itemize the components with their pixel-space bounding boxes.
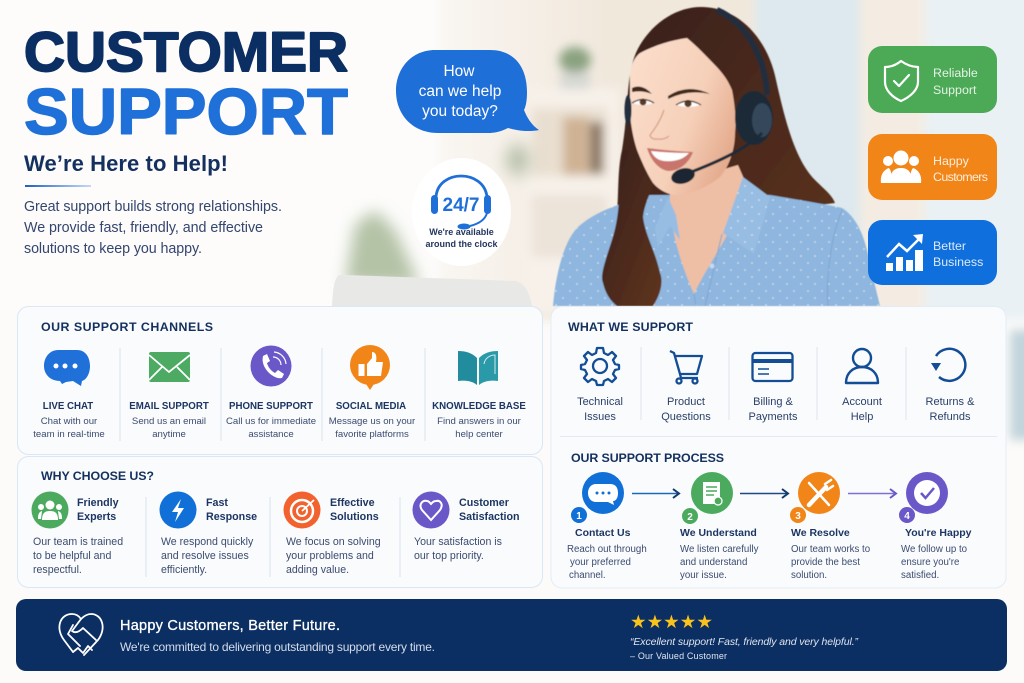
reason: fast response: Response (206, 511, 257, 523)
reason: friendly experts: Friendly (77, 497, 119, 509)
reason: friendly experts: Our team is trained (33, 536, 123, 548)
step 4: you're happy: You're Happy (905, 527, 972, 539)
title: customer support: CUSTOMER (24, 20, 348, 83)
icon: 24/7 headset (431, 176, 491, 230)
intro text: We provide fast, friendly, and effective (24, 220, 263, 236)
panel: our support channels: OUR SUPPORT CHANNELS (41, 320, 213, 334)
footer banner (16, 599, 1007, 671)
reason: effective solutions (284, 492, 381, 576)
icon: people (881, 150, 921, 183)
panel: why choose us: WHY CHOOSE US? (41, 469, 154, 483)
item: technical issues (577, 348, 623, 423)
step 2: we understand: We Understand (680, 527, 757, 539)
reason: customer satisfaction: Customer (459, 497, 509, 509)
reason: customer satisfaction: Your satisfaction is (414, 536, 502, 548)
heading: our support process: OUR SUPPORT PROCESS (571, 451, 724, 465)
badge: happy customers: Happy (933, 154, 970, 168)
channel: email text: EMAIL SUPPORT (129, 401, 209, 412)
step 2: we understand: your issue. (680, 570, 727, 581)
channel: phone text: Call us for immediate (226, 416, 316, 427)
step 1: contact us: Contact Us (575, 527, 631, 539)
reason: effective solutions: Effective (330, 497, 375, 509)
photo: support agent with headset (553, 7, 880, 306)
item: returns and refunds (926, 349, 975, 423)
icon: email (149, 352, 190, 382)
reason: customer satisfaction: Satisfaction (459, 511, 520, 523)
step 2: we understand (680, 472, 759, 581)
icon: knowledge base (458, 351, 498, 385)
item: billing and payments: Payments (749, 411, 798, 423)
step 2: we understand: 2 (687, 512, 693, 523)
item: technical issues: Issues (584, 411, 616, 423)
testimonial quote (630, 636, 858, 661)
icon: live chat (44, 350, 90, 386)
arrow 3 (848, 489, 896, 498)
step 1: contact us: 1 (576, 511, 582, 522)
panel: why choose us (18, 456, 542, 588)
channel: email text: Send us an email (132, 416, 206, 427)
speech bubble: How (443, 63, 475, 80)
channel: live chat text: Chat with our (41, 416, 98, 427)
icon: growth chart (886, 234, 923, 271)
step 3: we resolve: Our team works to (791, 544, 870, 555)
step 3: we resolve: We Resolve (791, 527, 850, 539)
item: returns and refunds: Refunds (930, 411, 971, 423)
step 4: you're happy: satisfied. (901, 570, 939, 581)
reason: effective solutions: your problems and (286, 550, 374, 562)
step 4: you're happy: ensure you're (901, 557, 959, 568)
step 3: we resolve (790, 472, 870, 581)
channel: social media text: Message us on your (329, 416, 416, 427)
channel: knowledge base text: Find answers in our (437, 416, 522, 427)
intro text (24, 199, 282, 257)
channel: social media text: SOCIAL MEDIA (336, 401, 406, 412)
24/7 badge: 24/7 (443, 195, 479, 216)
channel: knowledge base text: help center (455, 429, 504, 440)
24/7 badge: around the clock (425, 239, 498, 249)
reason: friendly experts: respectful. (33, 564, 82, 576)
step 1: contact us (567, 472, 647, 581)
channel: social media text (329, 401, 416, 440)
title: customer support: SUPPORT (24, 75, 348, 148)
speech bubble (396, 50, 539, 133)
testimonial quote: “Excellent support! Fast, friendly and very helpful.” (630, 636, 858, 648)
24/7 badge: We're available (429, 227, 494, 237)
item: billing and payments (749, 353, 798, 423)
panel: our support channels (18, 306, 542, 454)
step 1: contact us: Reach out through (567, 544, 647, 555)
reason: friendly experts: to be helpful and (33, 550, 111, 562)
step 3: we resolve: 3 (795, 511, 801, 522)
reason: fast response (160, 492, 257, 576)
item: account help (842, 349, 882, 423)
channel: phone text (226, 401, 316, 440)
channel: email text (129, 401, 209, 440)
item: technical issues: Technical (577, 396, 623, 408)
24/7 badge (412, 158, 511, 266)
step 2: we understand: and understand (680, 557, 747, 568)
step 4: you're happy: 4 (904, 511, 910, 522)
channel: knowledge base text (432, 401, 526, 440)
step 4: you're happy: We follow up to (901, 544, 967, 555)
icon: heart handshake (59, 614, 103, 655)
item: product questions (661, 351, 711, 423)
arrow 2 (740, 489, 788, 498)
reason: fast response: and resolve issues (161, 550, 249, 562)
reason: fast response: Fast (206, 497, 228, 509)
channel: email text: anytime (152, 429, 186, 440)
channel: social media text: favorite platforms (335, 429, 409, 440)
subtitle: We’re Here to Help! (24, 151, 228, 176)
arrow 1 (632, 489, 679, 498)
item: returns and refunds: Returns & (926, 396, 975, 408)
intro text: Great support builds strong relationships. (24, 199, 282, 215)
reason: customer satisfaction: our top priority. (414, 550, 484, 562)
intro text: solutions to keep you happy. (24, 241, 202, 257)
item: account help: Account (842, 396, 882, 408)
panel: what we support and process (551, 306, 1006, 588)
badge: reliable support: Support (933, 83, 977, 97)
step 1: contact us: your preferred (570, 557, 631, 568)
badge: happy customers (868, 134, 997, 200)
channel: live chat text: team in real-time (33, 429, 105, 440)
item: billing and payments: Billing & (753, 396, 794, 408)
item: account help: Help (851, 411, 873, 423)
badge: reliable support: Reliable (933, 66, 978, 80)
channel: knowledge base text: KNOWLEDGE BASE (432, 401, 526, 412)
step 2: we understand: We listen carefully (680, 544, 759, 555)
reason: effective solutions: adding value. (286, 564, 349, 576)
reason: customer satisfaction (412, 492, 520, 562)
channel: live chat text (33, 401, 105, 440)
badge: happy customers: Customers (933, 170, 988, 184)
five star rating: ★★★★★ (630, 612, 713, 633)
heading: what we support: WHAT WE SUPPORT (568, 320, 693, 334)
step 3: we resolve: solution. (791, 570, 827, 581)
reason: effective solutions: We focus on solving (286, 536, 381, 548)
badge: better business: Business (933, 255, 983, 269)
reason: fast response: efficiently. (161, 564, 207, 576)
channel: phone text: PHONE SUPPORT (229, 401, 313, 412)
item: product questions: Questions (661, 411, 711, 423)
reason: effective solutions: Solutions (330, 511, 379, 523)
badge: reliable support (868, 46, 997, 113)
reason: friendly experts: Experts (77, 511, 116, 523)
footer banner: We're committed to delivering outstanding support every time. (120, 640, 435, 654)
step 4: you're happy (899, 472, 972, 581)
speech bubble: you today? (422, 103, 498, 120)
icon: shield (885, 61, 918, 101)
step 1: contact us: channel. (569, 570, 606, 581)
reason: friendly experts (32, 492, 123, 576)
footer banner: Happy Customers, Better Future. (120, 618, 340, 634)
item: product questions: Product (667, 396, 705, 408)
title: customer support (24, 20, 348, 148)
channel: live chat text: LIVE CHAT (43, 401, 93, 412)
badge: better business: Better (933, 239, 966, 253)
channel: phone text: assistance (248, 429, 294, 440)
icon: phone (250, 346, 292, 386)
icon: social media (350, 345, 390, 390)
testimonial quote: – Our Valued Customer (630, 651, 727, 661)
step 3: we resolve: provide the best (791, 557, 860, 568)
reason: fast response: We respond quickly (161, 536, 254, 548)
badge: better business (868, 220, 997, 285)
speech bubble: can we help (419, 83, 501, 100)
